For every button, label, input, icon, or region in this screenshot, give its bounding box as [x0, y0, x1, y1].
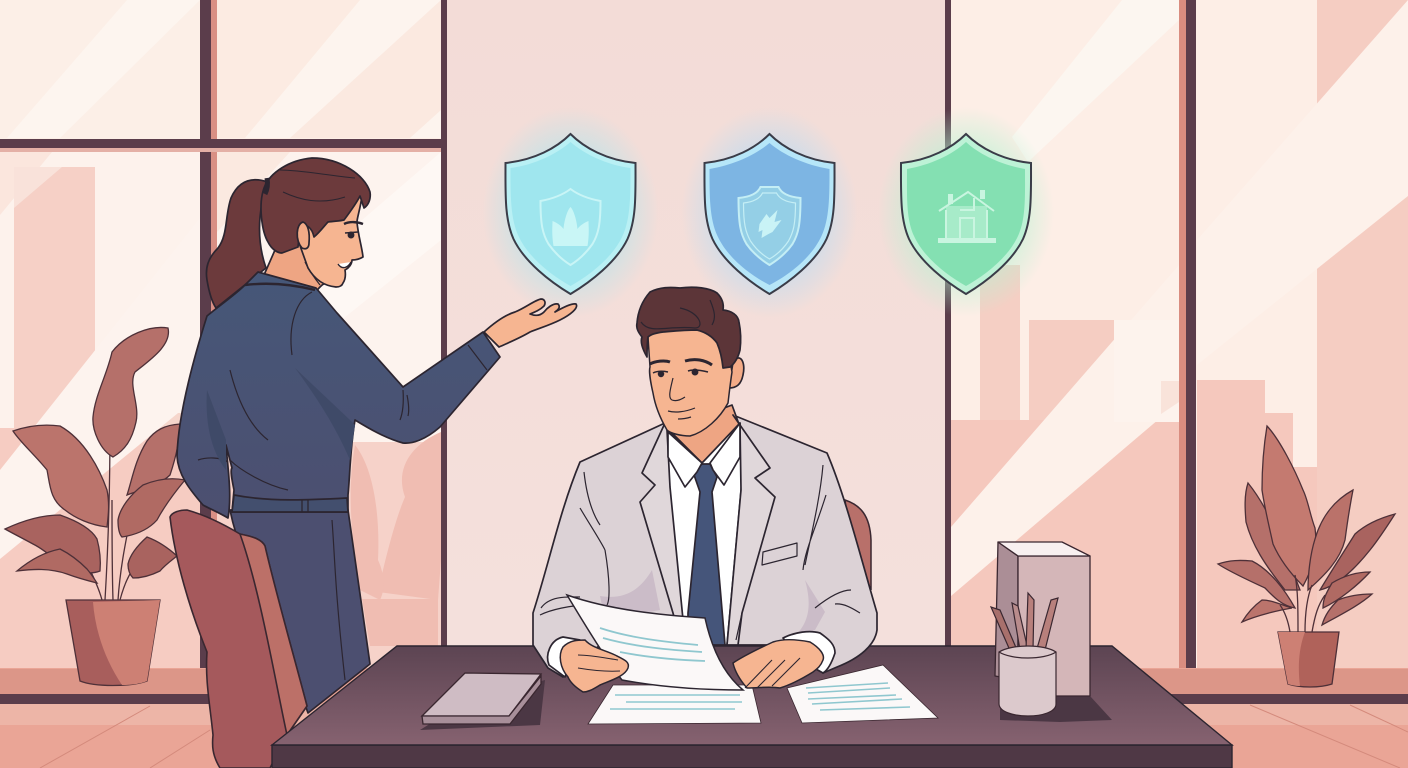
plant: right potted plant [1218, 426, 1395, 687]
ponytail [206, 180, 268, 308]
jacket lapels [640, 423, 685, 640]
desk [272, 646, 1232, 768]
woman's hair [261, 158, 370, 253]
man's hair [637, 287, 741, 368]
pencil cup [991, 593, 1058, 716]
person: woman advisor [177, 158, 577, 713]
icon: green shield with house [878, 107, 1054, 317]
box file [995, 542, 1090, 696]
plant: left potted plant [5, 327, 185, 686]
sleeve details [540, 465, 860, 640]
man's tie [688, 464, 725, 645]
window frames [0, 0, 1196, 668]
chair back: man's side [845, 500, 871, 590]
woman's belt [232, 495, 348, 512]
man's jacket [533, 415, 877, 677]
woman's jacket [177, 272, 500, 518]
ear [297, 222, 309, 249]
document: lower centre page [588, 685, 761, 724]
right window pane tones [951, 0, 1408, 670]
left window pane tones [0, 0, 441, 670]
floor and window sills [0, 668, 1408, 768]
woman's eye and smile [305, 222, 363, 285]
document: right page [787, 665, 938, 723]
shirt collar [668, 423, 740, 487]
man's facial features [650, 360, 712, 419]
man's ear [729, 358, 744, 388]
tablet on desk [422, 673, 541, 724]
woman's pants [230, 510, 370, 713]
icon: blue shield [682, 107, 858, 317]
woman's face [298, 196, 363, 287]
man's face [647, 322, 732, 436]
breast pocket [762, 543, 797, 565]
neck [264, 240, 330, 292]
hand: man's left hand on desk [733, 640, 823, 688]
man's neck [667, 405, 740, 463]
shirt cuffs [548, 637, 580, 677]
woman's hand [484, 299, 577, 347]
person: man with documents [533, 287, 877, 677]
silhouette plant behind window [351, 432, 441, 646]
man's shirt [667, 423, 742, 645]
chair: woman's side [170, 510, 307, 768]
hand: man's right hand over page [560, 640, 628, 692]
document: held page [567, 595, 743, 690]
icon: cyan shield [482, 107, 658, 317]
